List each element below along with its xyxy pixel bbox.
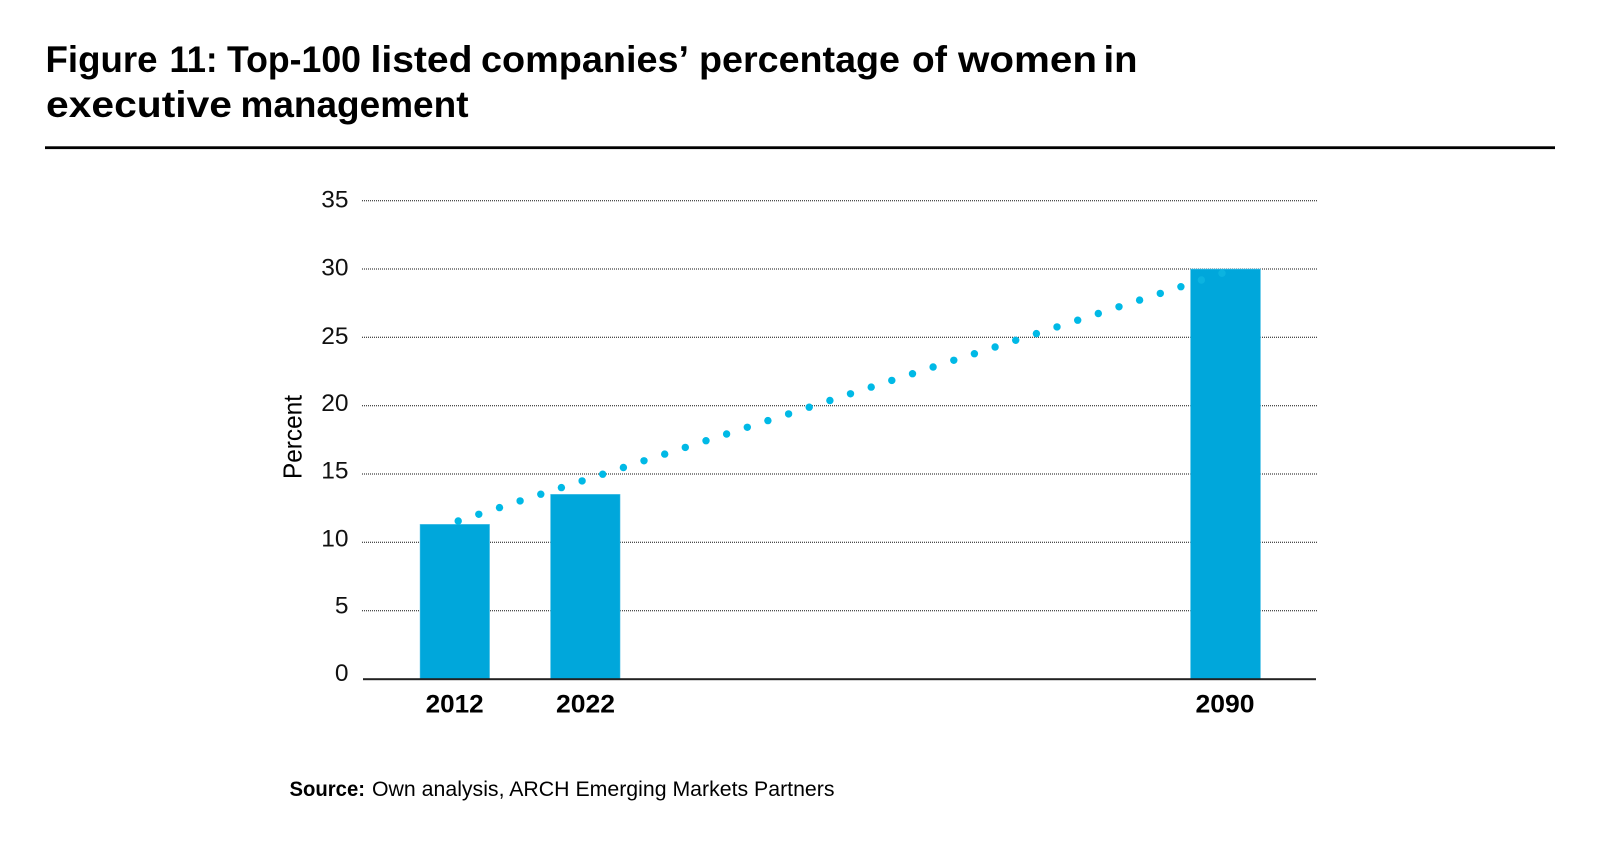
y-axis labels: 20 — [321, 390, 348, 417]
y-axis title: Percent — [277, 394, 307, 479]
y-axis labels: 5 — [335, 592, 348, 620]
title: Figure — [46, 39, 158, 80]
x-axis labels: 2022 — [556, 690, 615, 718]
x-axis labels: 2012 — [426, 690, 484, 718]
y-axis labels: 35 — [321, 186, 348, 213]
title: in — [1104, 39, 1138, 80]
trend line: dotted — [454, 270, 1226, 525]
bar: 2022 — [550, 494, 620, 679]
x-axis labels — [426, 690, 1254, 718]
bar: 2090 — [1190, 269, 1260, 679]
y-axis labels: 15 — [321, 458, 348, 484]
x-axis labels: 2090 — [1196, 690, 1254, 718]
title: executive — [46, 84, 232, 125]
source note: Source: — [290, 777, 365, 801]
title: listed — [370, 39, 472, 80]
title: 11: — [170, 39, 218, 80]
title — [46, 39, 1138, 125]
bar: 2012 — [420, 524, 490, 679]
y-axis labels: 30 — [321, 254, 348, 281]
title: of — [912, 39, 948, 80]
y-axis labels: 25 — [321, 323, 348, 350]
title: management — [240, 84, 468, 125]
y-axis labels: 10 — [321, 526, 348, 553]
title: companies’ — [481, 39, 689, 80]
title: percentage — [699, 39, 900, 80]
title: women — [957, 39, 1097, 80]
bar chart — [277, 186, 1317, 718]
source note: Own analysis, ARCH Emerging Markets Partners — [372, 777, 834, 801]
title: Top-100 — [227, 39, 361, 80]
y-axis labels: 0 — [335, 660, 348, 687]
x-axis line — [363, 678, 1316, 680]
y-axis labels — [321, 186, 348, 687]
